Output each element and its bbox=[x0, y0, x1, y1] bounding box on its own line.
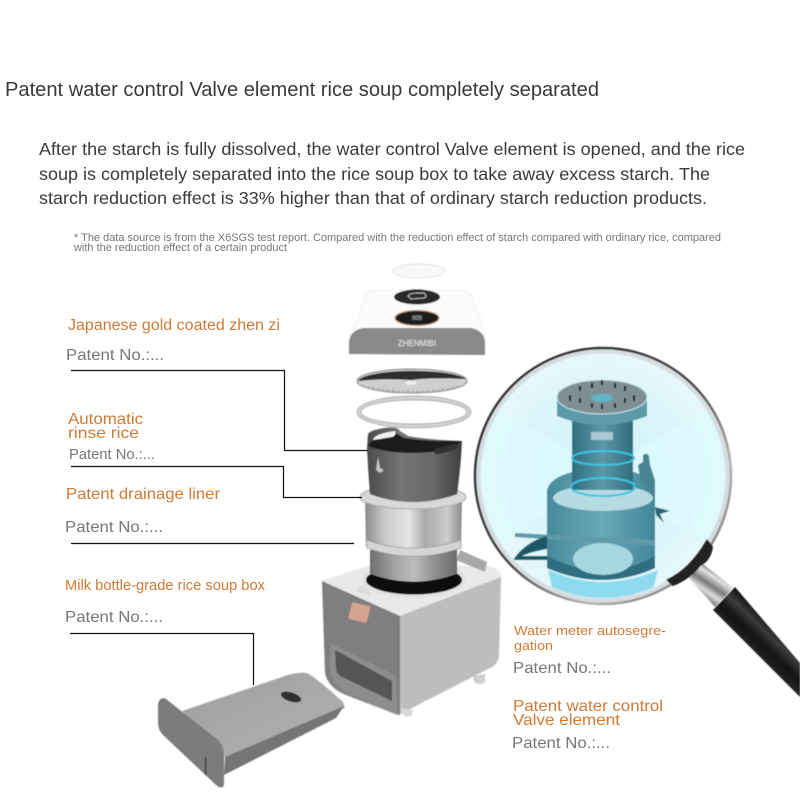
label: Water meter autosegregation: Patent No.:... bbox=[513, 660, 611, 677]
footnote bbox=[73, 232, 721, 254]
description paragraph bbox=[39, 139, 745, 208]
label: Patent water control Valve element: Valve element bbox=[513, 712, 621, 729]
label: Patent drainage liner: Patent No.:... bbox=[65, 519, 163, 536]
footnote: * The data source is from the X6SGS test report. Compared with the reduction effect of starch compared with ordinary rice, compared bbox=[74, 232, 721, 244]
label: Patent drainage liner bbox=[65, 486, 221, 536]
description paragraph: After the starch is fully dissolved, the water control Valve element is opened, and the rice bbox=[39, 139, 745, 159]
label: Japanese gold coated zhen zi: Japanese gold coated zhen zi bbox=[68, 317, 280, 334]
label: Japanese gold coated zhen zi bbox=[66, 317, 280, 364]
valve neck bbox=[571, 418, 635, 496]
lid with control panel: ZHENMIBI bbox=[398, 339, 436, 348]
label: Japanese gold coated zhen zi: Patent No.:... bbox=[66, 347, 164, 364]
description paragraph: soup is completely separated into the rice soup box to take away excess starch. The bbox=[39, 164, 710, 184]
magnifying glass handle bbox=[668, 541, 800, 697]
label: Water meter autosegregation: Water meter autosegre- bbox=[514, 623, 666, 638]
sealing ring bbox=[357, 396, 471, 428]
label: Water meter autosegregation: gation bbox=[514, 638, 553, 653]
steam plate bbox=[357, 369, 467, 393]
leader lines bbox=[70, 370, 368, 685]
dark basket liner bbox=[367, 427, 462, 502]
stainless inner pot bbox=[360, 485, 466, 582]
base unit bbox=[322, 550, 501, 717]
label: Automatic rinse rice: Automatic bbox=[68, 411, 143, 428]
valve top cap bbox=[557, 380, 647, 425]
lens light glow bbox=[482, 412, 724, 544]
label: Milk bottle-grade rice soup box: Patent No.:... bbox=[65, 609, 163, 626]
label: Milk bottle-grade rice soup box: Milk bottle-grade rice soup box bbox=[65, 578, 266, 594]
label: Patent water control Valve element bbox=[512, 698, 663, 752]
label: Patent drainage liner: Patent drainage liner bbox=[66, 486, 221, 503]
lid with control panel bbox=[349, 290, 485, 355]
description paragraph: starch reduction effect is 33% higher than that of ordinary starch reduction products. bbox=[39, 188, 707, 208]
label: Automatic rinse rice: Patent No.:... bbox=[69, 447, 155, 463]
label: Automatic rinse rice: rinse rice bbox=[68, 425, 139, 442]
footnote: with the reduction effect of a certain product bbox=[73, 242, 287, 254]
label: Automatic rinse rice bbox=[68, 411, 155, 463]
base opening bbox=[362, 562, 466, 598]
rice soup box drawer bbox=[158, 673, 345, 788]
lid with control panel: 000 bbox=[412, 316, 423, 322]
valve base cylinder bbox=[513, 454, 670, 600]
label: Patent water control Valve element: Patent No.:... bbox=[512, 735, 610, 752]
magnifying glass lens bbox=[475, 348, 731, 604]
label: Milk bottle-grade rice soup box bbox=[65, 578, 266, 626]
icon: top knob disc bbox=[393, 264, 445, 278]
title: Patent water control Valve element rice soup completely separated bbox=[5, 79, 599, 101]
label: Water meter autosegregation bbox=[513, 623, 666, 677]
label: Patent water control Valve element: Patent water control bbox=[513, 698, 663, 715]
